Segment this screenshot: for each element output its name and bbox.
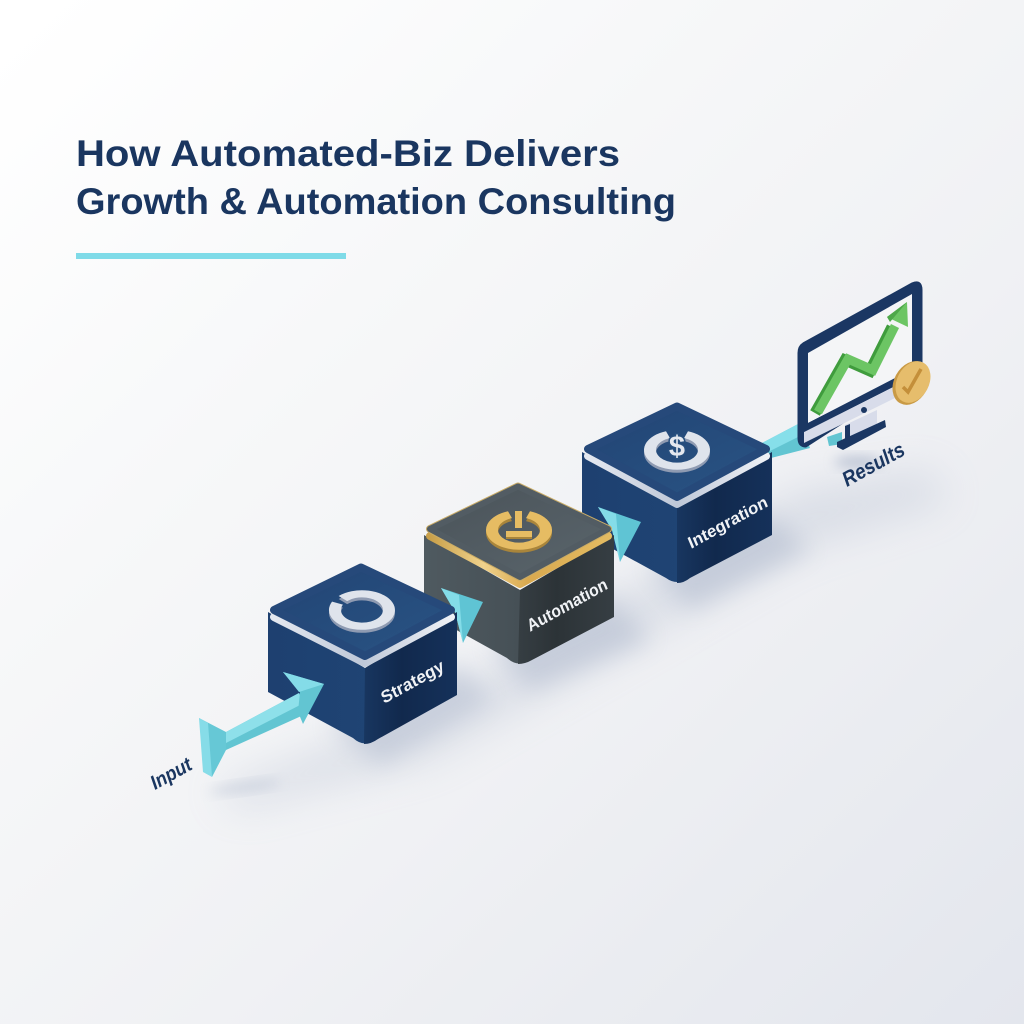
arrow: input <box>199 672 324 777</box>
icon: ring <box>335 594 389 629</box>
icon: power <box>492 511 546 549</box>
block: integration <box>582 406 772 583</box>
icon: dollar ring <box>650 431 704 469</box>
title <box>76 133 676 222</box>
title: Growth & Automation Consulting <box>76 181 676 222</box>
title: How Automated-Biz Delivers <box>76 133 620 174</box>
block: strategy <box>268 568 457 744</box>
block: automation <box>424 486 614 664</box>
label: integration: Integration <box>685 492 770 553</box>
icon: results monitor <box>798 282 937 450</box>
monitor frame <box>798 282 922 447</box>
icon: dollar ring: $ <box>669 431 685 463</box>
monitor chin <box>804 385 897 443</box>
gold check coin <box>885 355 937 411</box>
monitor screen <box>808 294 912 423</box>
arrow: into results <box>762 423 842 458</box>
label: input: Input <box>147 753 197 794</box>
arrow: automation to integration <box>598 507 641 562</box>
monitor stand <box>837 410 886 450</box>
label: results: Results <box>838 438 909 491</box>
ground shadows <box>209 456 950 810</box>
label: strategy: Strategy <box>378 656 447 708</box>
arrow: strategy to automation <box>441 588 483 643</box>
growth arrow <box>815 302 908 413</box>
label: automation: Automation <box>524 575 610 636</box>
title underline <box>76 253 346 259</box>
